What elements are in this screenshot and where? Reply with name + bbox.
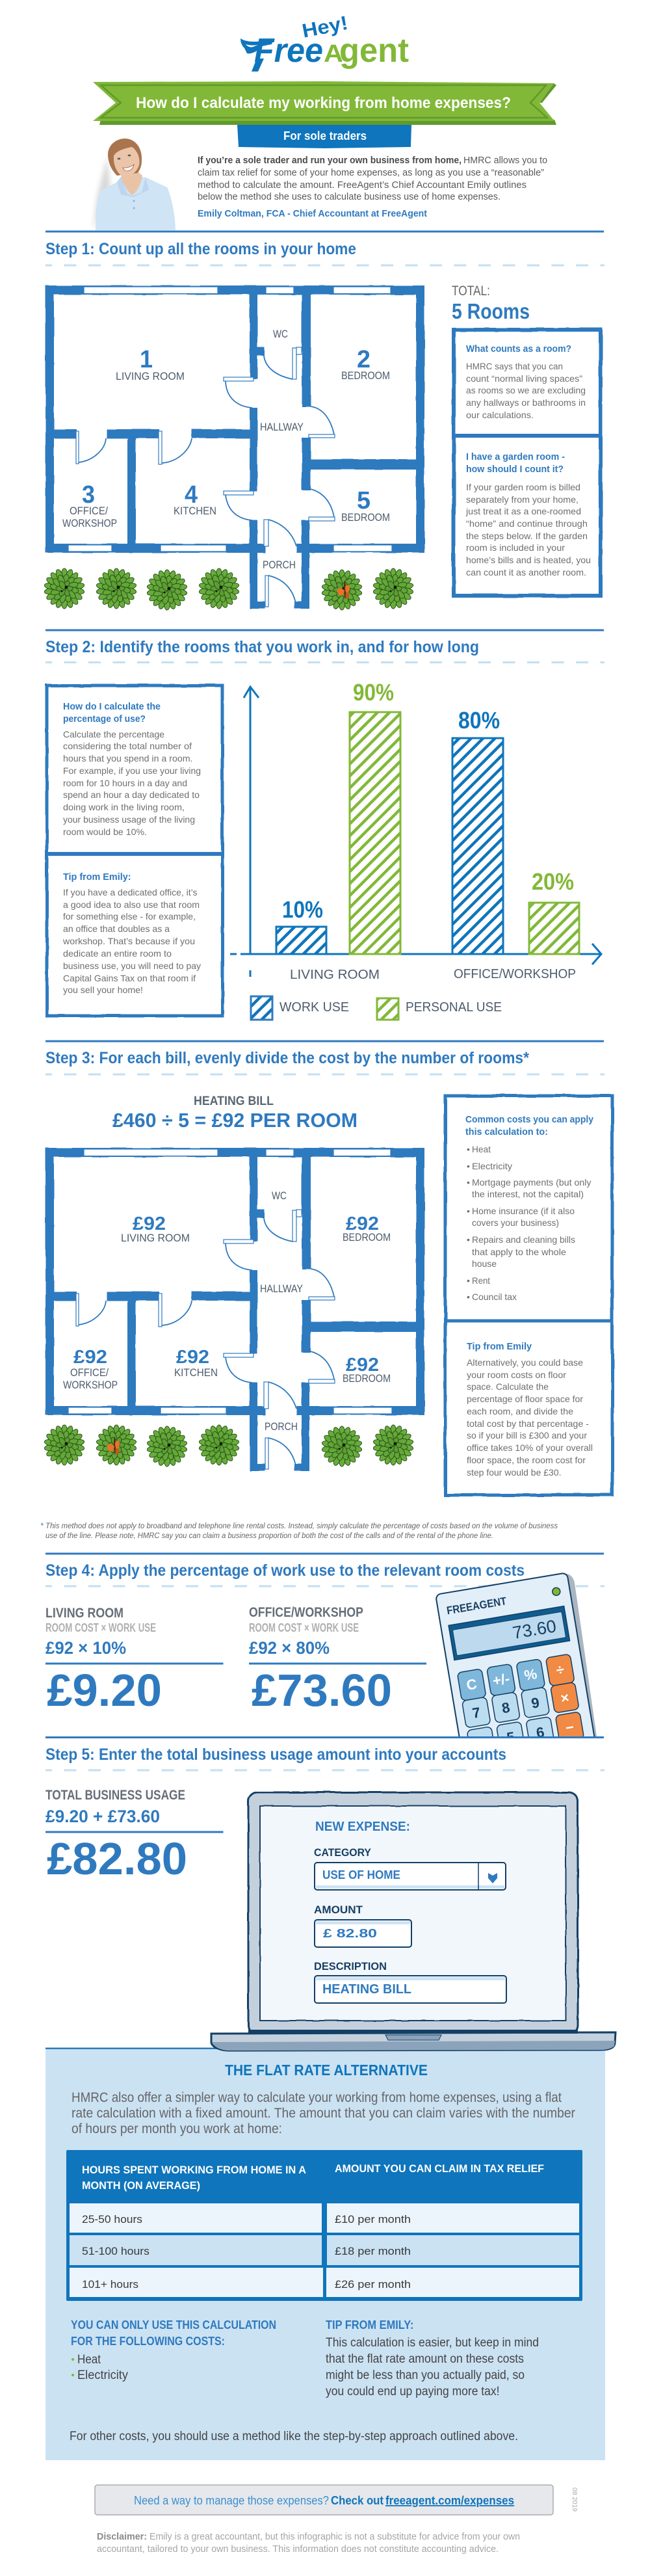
- flat rate intro: HMRC also offer a simpler way to calculate your working from home expenses, using a flat: [72, 2090, 562, 2105]
- list: eligible costs: [72, 2353, 128, 2382]
- bedroom 2 cost: BEDROOM: [343, 1372, 391, 1385]
- text: tip from Emily: [326, 2336, 539, 2398]
- text: tip from Emily: If you have a dedicated office, it’s: [63, 887, 198, 897]
- text: tip from Emily: [467, 1357, 593, 1478]
- text: tip from Emily: you sell your home!: [63, 985, 143, 995]
- icon: calculator: %: [523, 1666, 538, 1684]
- laptop base: [211, 2030, 616, 2051]
- footnote: use of the line. Please note, HMRC say you can claim a business proportion of both the cost of the calls and of the rental of the phone line.: [46, 1531, 493, 1540]
- LED: [552, 1587, 561, 1596]
- heading: tip from Emily: Tip from Emily: [467, 1341, 532, 1352]
- text: tip from Emily: you could end up paying more tax!: [326, 2385, 499, 2398]
- list: common costs: Council tax: [472, 1292, 517, 1302]
- icon: calculator: ÷: [555, 1661, 566, 1679]
- heading: eligible costs: FOR THE FOLLOWING COSTS:: [71, 2335, 225, 2348]
- icon: butterfly: [107, 1436, 120, 1455]
- step 4 heading: Step 4: Apply the percentage of work use to the relevant room costs: [46, 1561, 525, 1580]
- heading: common costs: [465, 1114, 594, 1137]
- table header: MONTH (ON AVERAGE): [82, 2179, 200, 2192]
- call to action: freeagent.com/expenses: [385, 2494, 514, 2507]
- room 4 label: [174, 481, 216, 517]
- hallway label: HALLWAY: [260, 421, 304, 433]
- intro paragraph: [198, 155, 547, 202]
- text: what counts: our calculations.: [466, 410, 534, 420]
- text: percentage: room would be 10%.: [63, 827, 147, 837]
- bar: living room personal 90%: [350, 712, 400, 954]
- icon: calculator: −: [564, 1719, 575, 1736]
- porch label: PORCH: [265, 1420, 298, 1433]
- illustration: laptop: [211, 1792, 616, 2051]
- text: tip from Emily: so if your bill is £300 and your: [467, 1430, 587, 1441]
- text: percentage: your business usage of the living: [63, 814, 195, 825]
- table rows: [82, 2213, 411, 2291]
- text: garden room: [465, 482, 591, 578]
- value 80%: 80%: [458, 707, 500, 734]
- table rows: £18 per month: [335, 2245, 411, 2257]
- calculation: total business usage: £9.20 + £73.60: [46, 1807, 160, 1826]
- heading: common costs: this calculation to:: [465, 1126, 548, 1137]
- heating bill calculation: £460 ÷ 5 = £92 PER ROOM: [112, 1109, 358, 1132]
- room total: [452, 284, 530, 323]
- laptop lid: [248, 1792, 578, 2034]
- room 2 label: 2: [357, 346, 370, 373]
- text: garden room: separately from your home,: [466, 494, 578, 505]
- list: common costs: •: [467, 1177, 470, 1188]
- text: what counts: any hallways or bathrooms in: [466, 397, 586, 408]
- icon: calculator: 6: [535, 1723, 545, 1741]
- room 1 label: 1: [140, 346, 153, 373]
- intro paragraph: claim tax relief for some of your home expenses, as long as you use a “reasonable”: [198, 167, 544, 178]
- list: common costs: Electricity: [472, 1161, 512, 1171]
- disclaimer: Emily is a great accountant, but this infographic is not a substitute for advice from your own: [150, 2531, 520, 2542]
- text: tip from Emily: each room, and divide the: [467, 1406, 573, 1416]
- disclaimer: Disclaimer:: [97, 2531, 147, 2542]
- logo: Hey! FreeAgent: [240, 12, 409, 72]
- room total: TOTAL:: [452, 284, 490, 299]
- step 3 heading: Step 3: For each bill, evenly divide the cost by the number of rooms*: [46, 1049, 529, 1067]
- disclaimer: accountant, tailored to your own business. This information does not constitute accounting advice.: [97, 2543, 499, 2555]
- icon: calculator: 5: [506, 1729, 516, 1746]
- list: common costs: that apply to the whole: [472, 1247, 566, 1257]
- list: common costs: covers your business): [472, 1217, 559, 1228]
- heading: garden room: I have a garden room -: [466, 451, 565, 462]
- text: what counts: as rooms so we are excluding: [466, 385, 586, 395]
- flat rate intro: [72, 2090, 575, 2136]
- keypad: [458, 1654, 584, 1736]
- logo flag mark: [240, 38, 274, 72]
- room 3 label: WORKSHOP: [62, 517, 117, 529]
- value 90%: 90%: [353, 679, 394, 706]
- description field: HEATING BILL: [322, 1982, 411, 1997]
- value 10%: 10%: [282, 896, 323, 923]
- icon: butterfly: [337, 580, 350, 600]
- text: tip from Emily: that the flat rate amount on these costs: [326, 2352, 524, 2366]
- step 1 heading: Step 1: Count up all the rooms in your home: [46, 240, 356, 258]
- step 5 heading: Step 5: Enter the total business usage amount into your accounts: [46, 1746, 506, 1764]
- text: percentage: Calculate the percentage: [63, 729, 164, 739]
- call to action: Check out: [331, 2494, 384, 2507]
- footnote: [40, 1521, 558, 1540]
- calculation: living room: £92 × 10%: [46, 1638, 126, 1658]
- text: garden room: If your garden room is billed: [466, 482, 580, 492]
- result: total: £82.80: [47, 1833, 187, 1884]
- calculation: office/workshop: ROOM COST × WORK USE: [249, 1621, 359, 1634]
- bedroom cost: £92: [346, 1214, 379, 1234]
- list: common costs: Home insurance (if it also: [472, 1206, 575, 1216]
- value 20%: 20%: [532, 868, 574, 895]
- disclaimer: [97, 2531, 520, 2555]
- axis label living room: LIVING ROOM: [290, 968, 380, 982]
- category field: [314, 1846, 506, 1890]
- text: what counts: count “normal living spaces”: [466, 373, 582, 384]
- heading: common costs: Common costs you can apply: [465, 1114, 594, 1125]
- room 3 label: 3: [82, 481, 95, 509]
- text: percentage: spend an hour a day dedicated to: [63, 790, 200, 800]
- calculation: office/workshop: £92 × 80%: [249, 1638, 330, 1658]
- panel: common costs: [445, 1096, 612, 1495]
- brand label: FREEAGENT: [446, 1595, 508, 1617]
- text: garden room: “home” and continue through: [466, 518, 588, 529]
- text: percentage: [63, 729, 201, 837]
- bedroom cost: BEDROOM: [343, 1231, 391, 1243]
- bedroom 2 cost: [343, 1355, 391, 1385]
- sole traders tab: [237, 125, 411, 148]
- list: common costs: •: [467, 1206, 470, 1216]
- icon: calculator: ×: [560, 1689, 570, 1706]
- room 5 label: BEDROOM: [341, 511, 390, 524]
- panel: what counts as a room: [454, 330, 601, 596]
- text: percentage: hours that you spend in a room.: [63, 753, 192, 764]
- room 4 label: 4: [185, 481, 198, 509]
- hallway label: HALLWAY: [260, 1282, 303, 1295]
- flat rate heading: THE FLAT RATE ALTERNATIVE: [225, 2062, 428, 2078]
- WC label: WC: [272, 1189, 287, 1202]
- panel: flat rate alternative: [46, 2049, 605, 2460]
- display: [448, 1606, 570, 1660]
- table header: HOURS SPENT WORKING FROM HOME IN A: [82, 2164, 306, 2176]
- text: tip from Emily: for something else - for example,: [63, 911, 196, 922]
- text: garden room: just treat it as a one-roomed: [465, 506, 581, 516]
- text: percentage: considering the total number of: [63, 741, 192, 751]
- text: garden room: can count it as another room.: [466, 567, 586, 578]
- text: tip from Emily: a good idea to also use that room: [63, 899, 200, 910]
- portrait: Emily Coltman: [93, 139, 176, 232]
- heading: eligible costs: [71, 2318, 276, 2348]
- description field: DESCRIPTION: [314, 1960, 387, 1972]
- amount field: [314, 1904, 411, 1947]
- call to action: Need a way to manage those expenses?: [134, 2494, 329, 2507]
- author credit: Emily Coltman, FCA - Chief Accountant at FreeAgent: [198, 208, 427, 219]
- text: tip from Emily: percentage of floor space for: [467, 1394, 583, 1404]
- list: common costs: •: [467, 1234, 470, 1245]
- table rows: 25-50 hours: [82, 2213, 142, 2225]
- text: what counts: HMRC says that you can: [466, 361, 563, 371]
- text: percentage: For example, if you use your living: [63, 765, 201, 776]
- porch label: PORCH: [263, 559, 296, 571]
- list: common costs: Mortgage payments (but only: [472, 1177, 592, 1188]
- office cost: [63, 1347, 118, 1391]
- room 5 label: 5: [357, 487, 370, 514]
- list: common costs: •: [467, 1292, 470, 1302]
- bar: office personal 20%: [529, 903, 579, 954]
- heading: percentage: How do I calculate the: [63, 701, 161, 712]
- text: tip from Emily: step four would be £30.: [467, 1467, 562, 1478]
- heading: tip from Emily: Tip from Emily:: [63, 871, 131, 883]
- heading: what counts: What counts as a room?: [466, 343, 571, 354]
- text: tip from Emily: total cost by that percentage -: [467, 1418, 589, 1429]
- logo wordmark: Agent: gent: [339, 32, 409, 70]
- display: 73.60: [511, 1616, 558, 1643]
- living room cost: £92: [133, 1214, 166, 1234]
- icon: calculator: C: [465, 1676, 478, 1693]
- description field: [314, 1960, 506, 2003]
- legend: PERSONAL USE: [406, 1000, 502, 1015]
- calculation: living room: ROOM COST × WORK USE: [46, 1621, 156, 1634]
- room 2 label: BEDROOM: [341, 369, 390, 382]
- icon: calculator: +/-: [491, 1670, 511, 1689]
- calculation: living room: [46, 1606, 224, 1716]
- intro paragraph: method to calculate the amount. FreeAgent’s Chief Accountant Emily outlines: [198, 179, 526, 191]
- heading: eligible costs: YOU CAN ONLY USE THIS CALCULATION: [71, 2318, 276, 2331]
- logo speech: Hey!: Hey!: [300, 12, 350, 42]
- list: common costs: the interest, not the capital): [472, 1189, 584, 1199]
- icon: calculator: 8: [500, 1699, 511, 1716]
- list: common costs: [467, 1144, 592, 1302]
- table rows: £26 per month: [335, 2278, 411, 2291]
- calculation: total business usage: [46, 1788, 224, 1884]
- title banner: [93, 81, 556, 125]
- icon: calculator: 7: [471, 1704, 482, 1721]
- kitchen cost: [174, 1347, 218, 1379]
- text: what counts: [466, 361, 586, 420]
- text: tip from Emily: Alternatively, you could base: [467, 1357, 583, 1368]
- floor plan: cost per room: [46, 1148, 424, 1471]
- text: tip from Emily: This calculation is easier, but keep in mind: [326, 2336, 539, 2350]
- form title: NEW EXPENSE:: [315, 1820, 410, 1834]
- text: tip from Emily: floor space, the room cost for: [467, 1455, 586, 1465]
- shrubs row: [44, 568, 413, 610]
- room 3 label: [62, 481, 117, 529]
- heading: garden room: how should I count it?: [466, 464, 564, 475]
- text: tip from Emily: dedicate an entire room to: [63, 948, 172, 959]
- call to action: [95, 2485, 553, 2515]
- bar: office work 80%: [452, 738, 503, 954]
- kitchen cost: £92: [176, 1347, 209, 1368]
- text: garden room: home’s bills and is heated, you: [466, 555, 591, 565]
- legend: [251, 996, 502, 1020]
- table: flat rates: [66, 2150, 582, 2301]
- chart axes: [230, 687, 601, 977]
- footnote: *: [40, 1521, 44, 1530]
- office cost: £92: [73, 1347, 107, 1368]
- room 5 label: [341, 487, 390, 524]
- text: tip from Emily: an office that doubles as a: [63, 923, 170, 934]
- office cost: WORKSHOP: [63, 1379, 118, 1391]
- result: office/workshop: £73.60: [252, 1665, 392, 1716]
- calculation: total business usage: TOTAL BUSINESS USAGE: [46, 1788, 185, 1803]
- flat rate intro: rate calculation with a fixed amount. The amount that you can claim varies with the number: [72, 2106, 575, 2121]
- panel: percentage of use: [47, 685, 222, 1016]
- text: percentage: room for 10 hours in a day and: [63, 778, 187, 788]
- bedroom cost: [343, 1214, 391, 1243]
- intro paragraph: HMRC allows you to: [463, 155, 547, 166]
- bedroom 2 cost: £92: [346, 1355, 379, 1375]
- list: common costs: Heat: [472, 1144, 491, 1154]
- table rows: £10 per month: [335, 2213, 411, 2225]
- list: common costs: •: [467, 1161, 470, 1171]
- banner title text: How do I calculate my working from home expenses?: [136, 94, 511, 112]
- amount field: AMOUNT: [314, 1904, 363, 1916]
- room 2 label: [341, 346, 390, 382]
- amount field: £ 82.80: [323, 1927, 377, 1940]
- room 4 label: KITCHEN: [174, 505, 216, 517]
- room 3 label: OFFICE/: [70, 505, 108, 517]
- text: tip from Emily: might be less than you actually paid, so: [326, 2369, 525, 2382]
- list: eligible costs: Heat: [77, 2353, 101, 2367]
- list: eligible costs: Electricity: [77, 2369, 128, 2382]
- logo wordmark: Free: Free: [254, 32, 323, 70]
- icon: calculator: 4: [476, 1734, 487, 1751]
- floor plan: room count: [46, 285, 424, 609]
- intro paragraph: If you’re a sole trader and run your own business from home,: [198, 155, 462, 166]
- category field: USE OF HOME: [322, 1868, 400, 1881]
- calculation: living room: LIVING ROOM: [46, 1606, 124, 1621]
- step 2 heading: Step 2: Identify the rooms that you work in, and for how long: [46, 638, 479, 656]
- list: common costs: house: [472, 1258, 497, 1269]
- table rows: 51-100 hours: [82, 2245, 150, 2257]
- heading: percentage: [63, 701, 161, 724]
- list: common costs: •: [467, 1275, 470, 1286]
- heading: garden room: [466, 451, 565, 475]
- intro paragraph: below the method she uses to calculate business use of home expenses.: [198, 191, 500, 202]
- text: tip from Emily: Capital Gains Tax on that room if: [63, 973, 196, 983]
- table rows: 101+ hours: [82, 2278, 138, 2291]
- shrubs row: [44, 1425, 413, 1467]
- text: tip from Emily: business use, you will need to pay: [63, 961, 201, 971]
- flat rate intro: of hours per month you work at home:: [72, 2121, 282, 2136]
- footnote: This method does not apply to broadband and telephone line rental costs. Instead, simply calculate the percentage of costs based on the volume of business: [46, 1521, 558, 1530]
- bar chart: work vs personal use: [230, 679, 601, 1020]
- text: garden room: room is included in your: [466, 542, 565, 553]
- list: common costs: Repairs and cleaning bills: [472, 1234, 575, 1245]
- icon: calculator: 9: [530, 1694, 541, 1712]
- room total: 5 Rooms: [452, 299, 530, 323]
- table header: AMOUNT YOU CAN CLAIM IN TAX RELIEF: [335, 2162, 544, 2175]
- result: living room: £9.20: [47, 1665, 162, 1716]
- list: common costs: Rent: [472, 1275, 490, 1286]
- category field: CATEGORY: [314, 1846, 372, 1859]
- axis label office/workshop: OFFICE/WORKSHOP: [454, 967, 576, 981]
- room 1 label: [116, 346, 185, 382]
- date stamp: 08 2019: [571, 2488, 578, 2512]
- legend: WORK USE: [280, 1000, 349, 1015]
- other costs note: For other costs, you should use a method like the step-by-step approach outlined above.: [70, 2430, 518, 2443]
- text: tip from Emily: [62, 887, 201, 995]
- WC label: WC: [273, 328, 288, 340]
- heating bill label: HEATING BILL: [194, 1095, 274, 1108]
- text: tip from Emily: office takes 10% of your overall: [467, 1442, 593, 1453]
- heading: percentage: percentage of use?: [63, 713, 146, 724]
- list: common costs: •: [467, 1144, 470, 1154]
- bar: living room work 10%: [276, 927, 326, 954]
- table header: [82, 2162, 544, 2192]
- calculation: office/workshop: OFFICE/WORKSHOP: [249, 1605, 363, 1620]
- icon: calculator: [436, 1573, 597, 1736]
- text: tip from Emily: your room costs on floor: [467, 1370, 566, 1380]
- tab label: For sole traders: [283, 129, 367, 142]
- text: tip from Emily: workshop. That’s because if you: [62, 936, 195, 946]
- office cost: OFFICE/: [70, 1366, 109, 1379]
- calculation: office/workshop: [249, 1605, 426, 1716]
- heading: tip from Emily: TIP FROM EMILY:: [326, 2318, 413, 2331]
- logo wordmark: Agent: A: [324, 40, 343, 68]
- living room cost: LIVING ROOM: [121, 1232, 190, 1244]
- room 1 label: LIVING ROOM: [116, 370, 185, 382]
- text: tip from Emily: space. Calculate the: [467, 1381, 549, 1392]
- text: percentage: doing work in the living room,: [63, 802, 185, 812]
- kitchen cost: KITCHEN: [174, 1366, 218, 1379]
- living room cost: [121, 1214, 190, 1244]
- text: garden room: the steps below. If the garden: [466, 531, 588, 541]
